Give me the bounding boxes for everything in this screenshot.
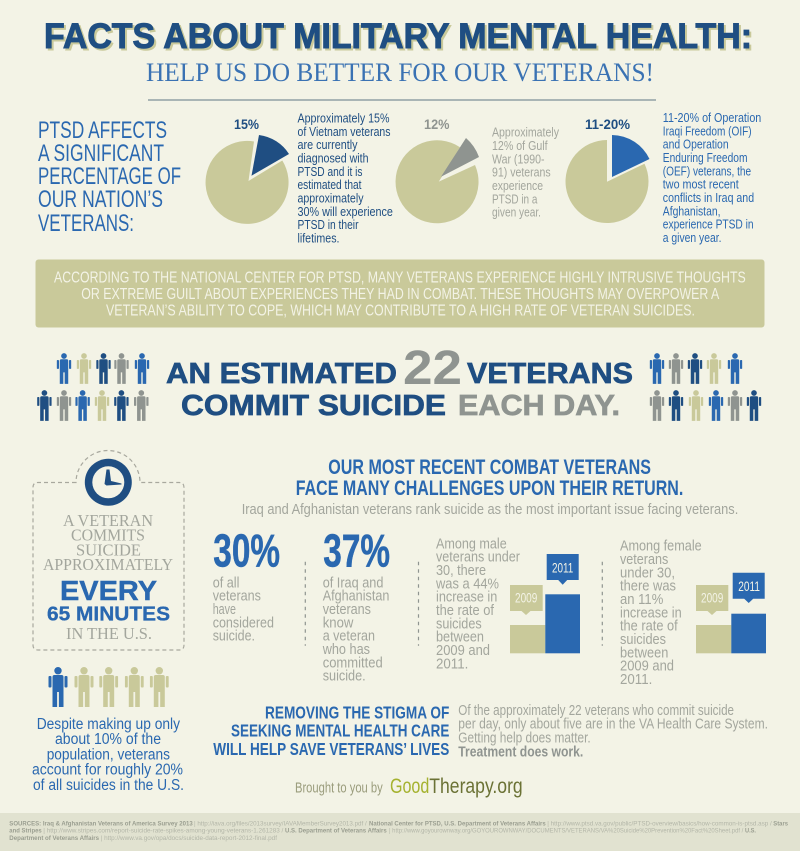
bar chart: male veterans <box>510 554 580 653</box>
heading: removing the stigma: WILL HELP SAVE VETERANS’ LIVES <box>213 739 449 759</box>
headline: an estimated 22 veterans: VETERANS <box>467 358 633 390</box>
text: male veterans <box>435 536 520 672</box>
heading: PTSD affects: PTSD AFFECTS <box>38 117 167 144</box>
stat: 30%: suicide. <box>213 629 255 645</box>
panel: every 65 minutes: COMMITS <box>71 526 145 545</box>
footer: sources: | http://www.ptsd.va.gov/public/PTSD-overview/basics/how-common-is-ptsd.asp / <box>547 820 772 827</box>
text: OIF and OEF veterans: Iraqi Freedom (OIF) <box>663 124 752 138</box>
text: male veterans: increase in <box>436 590 497 606</box>
stat: 37% <box>322 525 390 685</box>
icon row: one in five veterans <box>48 667 169 707</box>
text: OIF and OEF veterans: and Operation <box>663 138 729 152</box>
footer: sources: | http://www.va.gov/opa/docs/suicide-data-report-2012-final.pdf <box>101 835 277 842</box>
footer: sources: Stars <box>773 820 789 827</box>
bar chart: male veterans: 2009 <box>515 590 537 606</box>
text: Gulf War veterans: experience <box>492 179 543 193</box>
footer: sources: U.S. Department of Veterans Affairs <box>285 828 387 834</box>
footer: sources: | http://www.stripes.com/report-suicide-rate-spikes-among-young-veterans-1.261283 / <box>43 828 284 834</box>
icon row: veterans right <box>650 353 761 421</box>
bar chart: male veterans: 2011 <box>552 559 573 575</box>
footer: sources <box>0 813 800 851</box>
text: Gulf War veterans: 12% of Gulf <box>492 139 548 153</box>
heading: PTSD affects <box>38 117 181 237</box>
stat: 30%: veterans <box>213 589 261 605</box>
text: female veterans: increase in <box>620 605 682 621</box>
text: Vietnam veterans: of Vietnam veterans <box>298 125 390 139</box>
footer: sources: National Center for PTSD, U.S. Department of Veterans Affairs <box>369 820 546 827</box>
text: female veterans: veterans <box>620 552 668 568</box>
text: OIF and OEF veterans: Enduring Freedom <box>663 151 748 165</box>
text: OIF and OEF veterans: Afghanistan, <box>663 204 720 218</box>
pie chart: 11-20% OIF and OEF veterans <box>566 116 650 223</box>
subtitle: HELP US DO BETTER FOR OUR VETERANS! <box>146 58 654 87</box>
stat: 37%: 37% <box>323 525 390 577</box>
icon row: veterans left <box>37 353 149 421</box>
text: Vietnam veterans: Approximately 15% <box>298 112 390 126</box>
heading: combat veterans challenges: OUR MOST RECENT COMBAT VETERANS <box>328 455 651 479</box>
panel: every 65 minutes: IN THE U.S. <box>66 624 152 643</box>
heading: PTSD affects: VETERANS: <box>38 210 134 237</box>
panel: every 65 minutes: APPROXIMATELY <box>43 555 173 574</box>
headline: an estimated 22 veterans <box>166 342 633 422</box>
credit: brought to you by GoodTherapy.org: Brought to you by <box>295 781 383 797</box>
headline: an estimated 22 veterans: EACH DAY. <box>458 390 620 422</box>
pie chart: 12% Gulf War veterans: 12% <box>424 116 450 132</box>
text: 10% of the population: about 10% of the <box>55 731 161 748</box>
headline: an estimated 22 veterans: COMMIT SUICIDE <box>181 390 446 422</box>
heading: removing the stigma: SEEKING MENTAL HEALTH CARE <box>231 721 449 741</box>
text: female veterans: suicides <box>620 632 666 648</box>
text: treatment does work: Of the approximately 22 veterans who commit suicide <box>458 703 734 719</box>
text: Vietnam veterans: PTSD in their <box>298 218 358 232</box>
callout band: National Center for PTSD <box>36 260 764 328</box>
text: female veterans: Among female <box>620 539 702 555</box>
text: 10% of the population <box>32 716 184 794</box>
text: treatment does work: Treatment does work. <box>458 744 583 760</box>
text: Vietnam veterans: PTSD and it is <box>298 165 362 179</box>
text: Gulf War veterans: PTSD in a <box>492 192 537 206</box>
text: Vietnam veterans: lifetimes. <box>298 232 340 246</box>
footer: sources: SOURCES: Iraq & Afghanistan Veterans of America Survey 2013 <box>9 820 193 827</box>
text: female veterans: between <box>620 645 668 661</box>
pie chart: 12% Gulf War veterans <box>396 116 479 223</box>
panel: every 65 minutes: A VETERAN <box>63 511 153 530</box>
text: Gulf War veterans: given year. <box>492 206 541 220</box>
text: Gulf War veterans <box>492 126 560 220</box>
text: male veterans: veterans under <box>436 550 520 566</box>
text: 10% of the population: account for roughly 20% <box>32 762 183 779</box>
footer: sources: | http://www.goyourownway.org/GOYOUROWNWAY/DOCUMENTS/VETERANS/VA%20Suicide%20Prevention%20Fact%20Sheet.pdf / <box>389 828 744 834</box>
pie chart: 15% Vietnam veterans: 15% <box>234 116 259 132</box>
bar chart: female veterans <box>696 573 766 653</box>
heading: removing the stigma: REMOVING THE STIGMA OF <box>265 702 450 722</box>
text: 10% of the population: Despite making up only <box>37 716 180 733</box>
headline: an estimated 22 veterans: 22 <box>403 342 462 395</box>
text: female veterans <box>620 539 702 688</box>
text: treatment does work <box>458 703 768 760</box>
text: Vietnam veterans: are currently <box>298 138 358 152</box>
credit: brought to you by GoodTherapy.org: Good <box>390 775 429 798</box>
pie chart: 11-20% OIF and OEF veterans: 11-20% <box>585 116 631 132</box>
stat: 30%: have <box>213 602 236 618</box>
text: male veterans: between <box>436 630 484 646</box>
stat: 37%: who has <box>322 642 370 658</box>
panel: every 65 minutes <box>33 450 184 650</box>
text: Gulf War veterans: Approximately <box>492 126 560 140</box>
subheading: Iraq and Afghanistan veterans rank suicide as the most important issue facing veterans. <box>242 502 738 518</box>
bar chart: female veterans: 2011 <box>738 578 760 594</box>
text: male veterans: the rate of <box>436 603 495 619</box>
text: OIF and OEF veterans: a given year. <box>663 231 722 245</box>
text: OIF and OEF veterans: conflicts in Iraq and <box>663 191 754 205</box>
stat: 30% <box>213 525 280 645</box>
panel: every 65 minutes: EVERY <box>60 575 157 606</box>
stat: 37%: suicide. <box>323 669 366 685</box>
stat: 37%: Afghanistan <box>323 589 389 605</box>
stat: 37%: know <box>323 615 354 631</box>
heading: removing the stigma <box>213 702 450 759</box>
text: Vietnam veterans: diagnosed with <box>298 152 369 166</box>
stat: 37%: veterans <box>323 602 371 618</box>
heading: PTSD affects: OUR NATION’S <box>38 186 163 213</box>
text: Vietnam veterans: 30% will experience <box>298 205 393 219</box>
text: Vietnam veterans: approximately <box>298 192 364 206</box>
text: male veterans: 30, there <box>436 563 486 579</box>
text: female veterans: 2009 and <box>620 659 674 675</box>
text: female veterans: under 30, <box>620 565 675 581</box>
text: OIF and OEF veterans: 11-20% of Operation <box>663 111 761 125</box>
panel: every 65 minutes: SUICIDE <box>76 541 141 560</box>
text: 10% of the population: population, veterans <box>47 746 170 763</box>
heading: combat veterans challenges <box>296 455 683 500</box>
footer: sources: Department of Veterans Affairs <box>9 835 100 842</box>
footer: sources: and Stripes <box>9 828 42 834</box>
footer: sources: U.S. <box>745 828 756 834</box>
text: male veterans: was a 44% <box>435 576 499 592</box>
text: Gulf War veterans: War (1990- <box>492 152 544 166</box>
stat: 37%: committed <box>323 655 383 671</box>
text: OIF and OEF veterans: (OEF) veterans, the <box>663 164 751 178</box>
panel: every 65 minutes: 65 MINUTES <box>47 604 170 626</box>
stat: 30%: of all <box>213 575 239 591</box>
stat: 37%: of Iraq and <box>323 575 383 591</box>
text: Vietnam veterans <box>298 112 393 246</box>
heading: PTSD affects: PERCENTAGE OF <box>38 163 181 190</box>
stat: 30%: considered <box>213 615 274 631</box>
text: OIF and OEF veterans <box>663 111 761 245</box>
text: female veterans: the rate of <box>620 619 679 635</box>
stat: 37%: a veteran <box>323 629 375 645</box>
text: Gulf War veterans: 91) veterans <box>492 166 551 180</box>
text: female veterans: 2011. <box>620 672 652 688</box>
heading: PTSD affects: A SIGNIFICANT <box>38 140 164 167</box>
bar chart: female veterans: 2009 <box>701 590 723 606</box>
footer: sources: | http://iava.org/files/2013survey/IAVAMemberSurvey2013.pdf / <box>194 820 367 827</box>
credit: brought to you by GoodTherapy.org <box>295 775 523 798</box>
icon: clock <box>85 459 132 506</box>
stat: 30%: 30% <box>213 525 280 577</box>
text: treatment does work: Getting help does matter. <box>458 731 591 747</box>
text: male veterans: suicides <box>436 616 482 632</box>
text: Vietnam veterans: estimated that <box>298 178 362 192</box>
text: male veterans: 2011. <box>436 656 468 672</box>
text: OIF and OEF veterans: experience PTSD in <box>663 218 754 232</box>
text: 10% of the population: of all suicides in the U.S. <box>33 777 184 794</box>
text: male veterans: Among male <box>436 536 507 552</box>
credit: brought to you by GoodTherapy.org: Therapy.org <box>429 775 523 798</box>
text: female veterans: an 11% <box>620 592 663 608</box>
headline: an estimated 22 veterans: AN ESTIMATED <box>166 358 397 390</box>
pie chart: 15% Vietnam veterans <box>206 116 289 224</box>
text: OIF and OEF veterans: two most recent <box>663 178 739 192</box>
text: male veterans: 2009 and <box>436 643 490 659</box>
title: FACTS ABOUT MILITARY MENTAL HEALTH: <box>44 17 752 56</box>
text: female veterans: there was <box>620 579 676 595</box>
